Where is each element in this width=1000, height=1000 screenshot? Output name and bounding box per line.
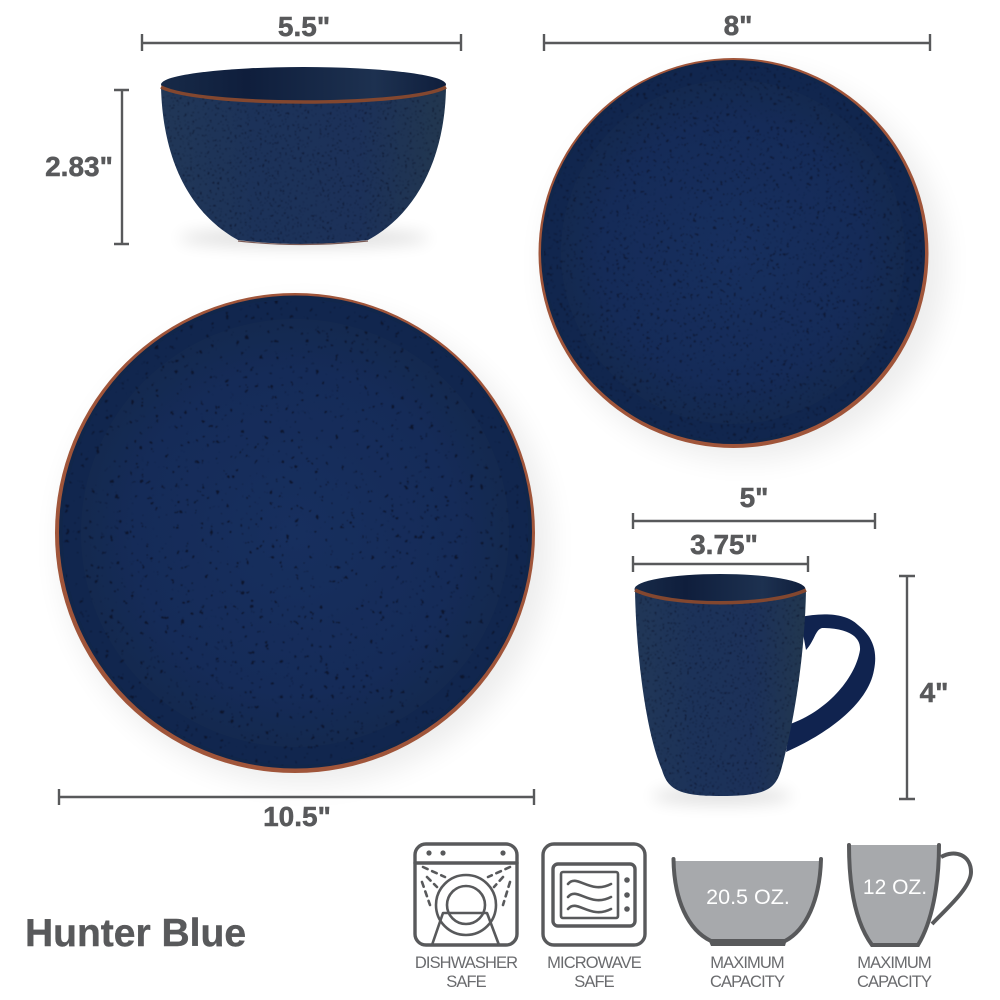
title: Hunter Blue: Hunter Blue [25, 912, 246, 955]
dimension: small plate width 8 in [544, 10, 930, 51]
label: mug maximum capacity: MAXIMUM [857, 954, 931, 972]
dimension: bowl width 5.5 in [142, 11, 461, 51]
icon: microwave safe [543, 844, 645, 945]
dimension: small plate width 8 in: 8" [724, 10, 752, 41]
icon: bowl capacity 20.5 oz [674, 859, 821, 946]
bowl [160, 67, 450, 247]
dimension: mug height 4 in [899, 576, 948, 799]
label: microwave safe: MICROWAVE [547, 954, 642, 972]
label: bowl maximum capacity: MAXIMUM [710, 954, 784, 972]
dimension: mug height 4 in: 4" [920, 677, 948, 708]
dimension: bowl height 2.83 in: 2.83" [45, 151, 113, 182]
label: dishwasher safe: SAFE [446, 973, 487, 991]
label: bowl maximum capacity: CAPACITY [710, 973, 785, 991]
dimension: mug rim width 3.75 in [633, 529, 808, 572]
label: mug maximum capacity: CAPACITY [857, 973, 932, 991]
dimension: bowl width 5.5 in: 5.5" [278, 11, 330, 42]
dimension: large plate width 10.5 in [59, 789, 534, 832]
icon: mug capacity 12 oz [849, 845, 971, 945]
dimension: bowl height 2.83 in [45, 90, 129, 244]
icon: bowl capacity 20.5 oz: 20.5 OZ. [706, 885, 790, 909]
dimension: mug rim width 3.75 in: 3.75" [690, 529, 758, 560]
icon: dishwasher safe [415, 844, 517, 945]
label: microwave safe: SAFE [574, 973, 615, 991]
dimension: large plate width 10.5 in: 10.5" [263, 801, 331, 832]
dimension: mug overall width 5 in: 5" [740, 482, 768, 513]
dimension: mug overall width 5 in [633, 482, 875, 529]
small plate [538, 58, 945, 460]
large plate [55, 293, 550, 785]
icon: mug capacity 12 oz: 12 OZ. [863, 876, 927, 899]
label: dishwasher safe: DISHWASHER [415, 954, 518, 972]
mug [634, 574, 875, 804]
